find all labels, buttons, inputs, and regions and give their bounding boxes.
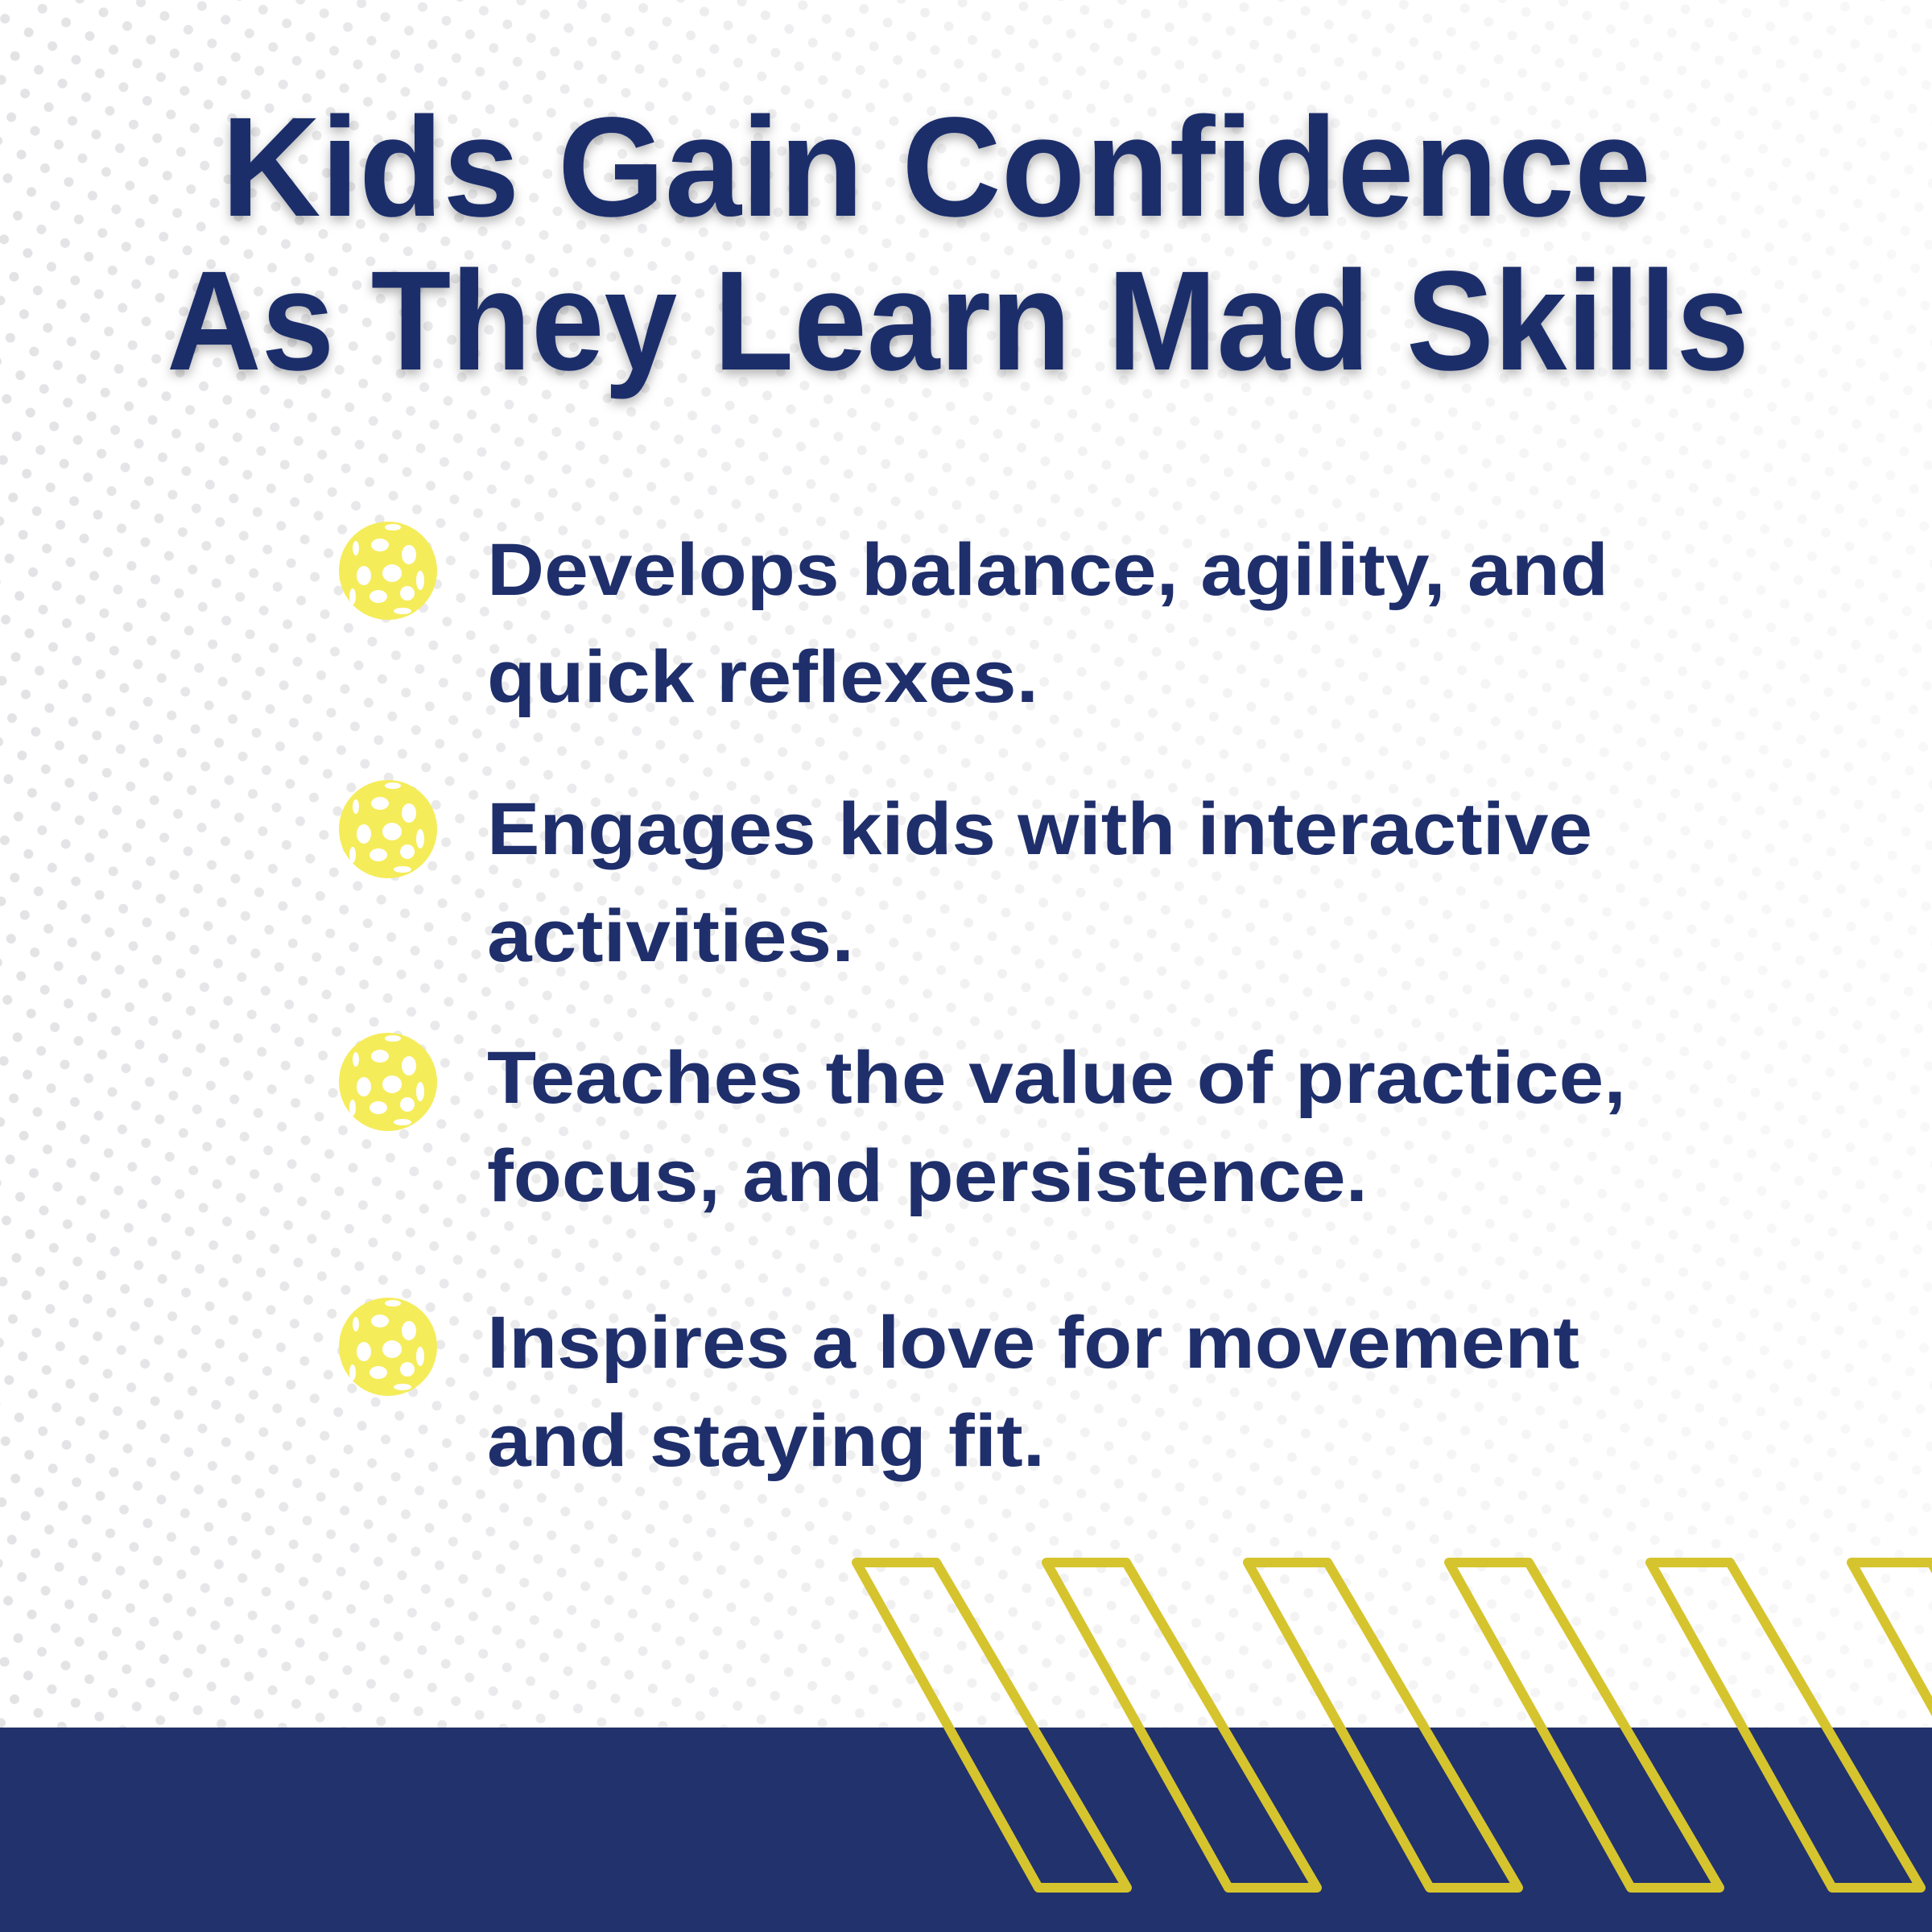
navy footer band	[0, 1728, 1932, 1932]
title	[167, 89, 1749, 400]
bullet 1	[339, 522, 1608, 718]
title: Kids Gain Confidence	[221, 89, 1651, 246]
bullet 2: Engages kids with interactive	[487, 788, 1592, 870]
bullet 4: and staying fit.	[487, 1400, 1045, 1482]
title: As They Learn Mad Skills	[167, 242, 1749, 400]
bullet 3: Teaches the value of practice,	[487, 1037, 1626, 1119]
yellow parallelogram stripes	[857, 1563, 1932, 1888]
bullet 1: Develops balance, agility, and	[487, 529, 1608, 611]
bullet 3: focus, and persistence.	[487, 1135, 1368, 1217]
bullet 4: Inspires a love for movement	[487, 1302, 1579, 1384]
bullet 1: quick reflexes.	[487, 636, 1038, 718]
bullet 3	[339, 1033, 1626, 1217]
bullet 4	[339, 1298, 1579, 1482]
bullet 2: activities.	[487, 895, 854, 977]
bullet 2	[339, 780, 1592, 977]
bullet list	[339, 522, 1626, 1482]
